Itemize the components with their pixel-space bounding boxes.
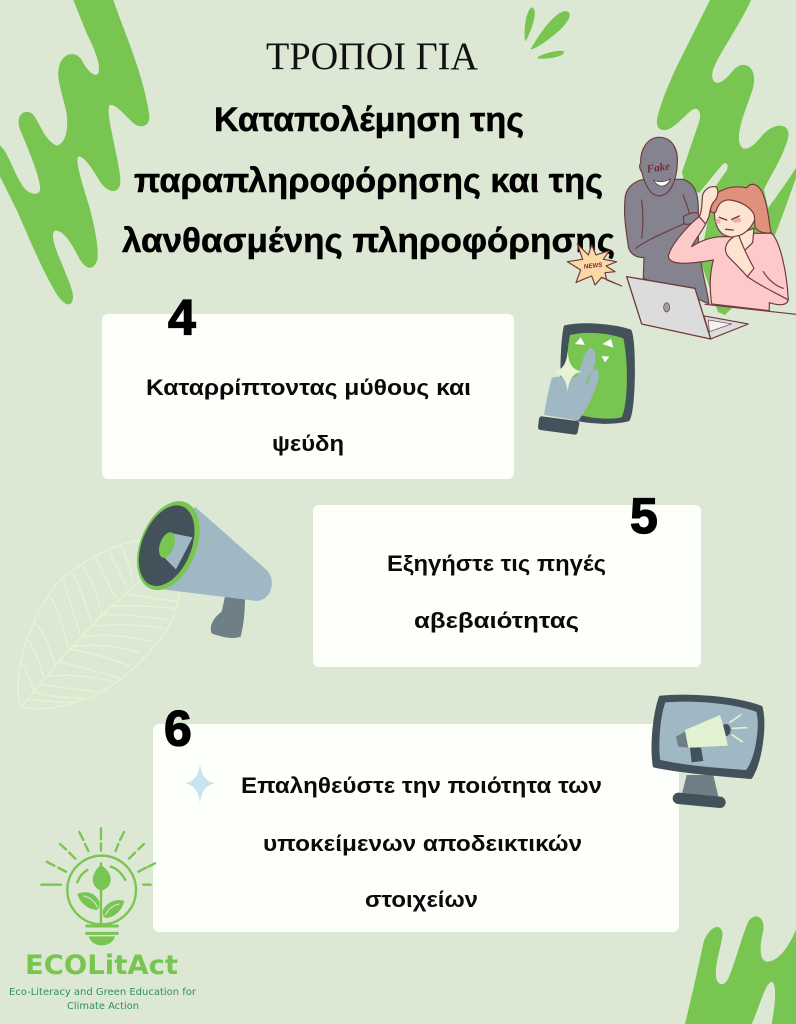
icon: megaphone [125,492,272,638]
subtitle: λανθασμένης πληροφόρησης [122,222,615,260]
logo tagline: Climate Action [67,1001,139,1012]
card 4 text [146,375,471,456]
table line [705,304,796,314]
man: Fake [645,161,671,176]
decoration: top right green blob [657,0,796,315]
subtitle: Καταπολέμηση της [214,101,524,139]
panel: card 4 [102,290,514,479]
logo bulb [41,828,155,945]
decoration: top sprout leaves [525,7,570,59]
logo tagline: Eco-Literacy and Green Education for [9,987,197,998]
card 6 text: υποκείμενων αποδεικτικών [263,831,582,856]
subtitle: παραπληροφόρησης και της [134,162,603,200]
decoration: pale leaf outline [18,540,180,709]
logo: ECOLitAct [9,828,197,1012]
number 6: 6 [164,700,192,756]
card 6 text: Επαληθεύστε την ποιότητα των [241,773,602,798]
card 6 text [241,773,602,912]
subtitle [122,101,615,260]
number 4: 4 [168,290,196,346]
man [625,137,709,304]
card 5 text [387,551,606,633]
logo tagline [9,987,197,1012]
card 4 text: ψεύδη [272,431,344,456]
card 4 text: Καταρρίπτοντας μύθους και [146,375,471,400]
logo name: ECOLitAct [25,950,178,981]
laptop [627,277,748,339]
icon: tablet with hand [541,325,634,432]
card 5 text: Εξηγήστε τις πηγές [387,551,606,576]
panel: card 6 [153,700,679,932]
card 5 text: αβεβαιότητας [414,608,579,633]
card 6 text: στοιχείων [365,887,478,912]
news burst [567,244,622,286]
illustration: fake news man, confused woman and laptop [567,137,796,339]
woman [668,184,788,311]
decoration: left green blob [0,0,149,304]
icon: monitor with megaphone [653,697,762,802]
icon: blue sparkle [185,763,215,804]
decoration: bottom right green blob [685,916,796,1024]
news burst: NEWS [583,262,604,271]
title: ΤΡΟΠΟΙ ΓΙΑ [266,35,478,78]
number 5: 5 [630,488,658,544]
heading block [122,35,615,260]
panel: card 5 [313,488,701,667]
